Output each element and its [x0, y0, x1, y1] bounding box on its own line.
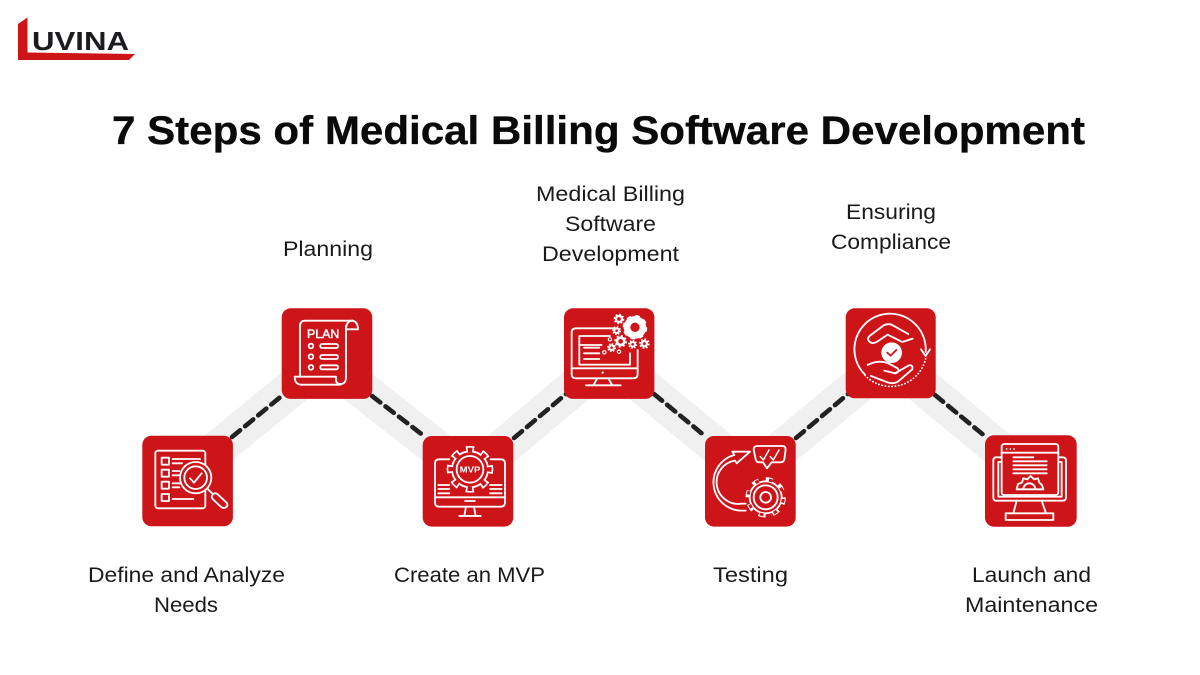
- step 7 tile: launch and maintenance: [985, 435, 1077, 527]
- label: create an MVP: Create an MVP: [394, 564, 545, 587]
- label: define and analyze needs: [88, 564, 285, 617]
- step 5 tile: testing: [705, 436, 796, 527]
- label: medical billing software development: Development: [542, 243, 679, 266]
- label: launch and maintenance: Maintenance: [965, 594, 1098, 617]
- step 4 tile: medical billing software development: [564, 308, 654, 399]
- step 3 tile: create an MVP: [423, 436, 513, 527]
- icon: checklist with magnifier: [155, 451, 227, 508]
- icon: hands with check and circular arrow: [854, 314, 930, 386]
- label: medical billing software development: Medical Billing: [536, 183, 685, 206]
- logo: Luvina: UVINA: [32, 26, 129, 56]
- label: ensuring compliance: [831, 201, 951, 254]
- label: ensuring compliance: Ensuring: [846, 201, 936, 224]
- icon: MVP monitor with gear: MVP: [460, 465, 481, 475]
- label: ensuring compliance: Compliance: [831, 231, 951, 254]
- label: launch and maintenance: Launch and: [972, 564, 1091, 587]
- step 1 tile: define and analyze needs: [142, 436, 233, 526]
- label: medical billing software development: [536, 183, 685, 266]
- label: define and analyze needs: Define and Analyze: [88, 564, 285, 587]
- icon: arrow, speech bubble and gear: [713, 446, 786, 515]
- label: define and analyze needs: Needs: [154, 594, 218, 617]
- label: medical billing software development: Software: [565, 213, 656, 236]
- step 2 tile: planning: [282, 308, 372, 399]
- title: 7 Steps of Medical Billing Software Development: [112, 109, 1085, 153]
- label: planning: Planning: [283, 238, 373, 261]
- logo: Luvina: [18, 18, 135, 60]
- icon: plan scroll: PLAN: [307, 327, 339, 341]
- label: launch and maintenance: [965, 564, 1098, 617]
- icon: monitor with window and gear: [993, 444, 1066, 520]
- dashed connector path: [232, 394, 986, 438]
- gray zigzag band: [187, 357, 1031, 477]
- label: testing: Testing: [713, 564, 788, 587]
- icon: monitor with gears: [572, 315, 649, 385]
- step 6 tile: ensuring compliance: [846, 308, 936, 398]
